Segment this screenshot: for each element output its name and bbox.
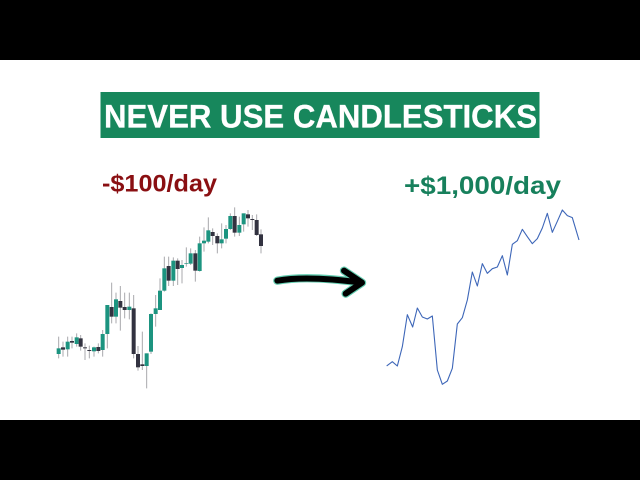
line chart xyxy=(387,210,579,384)
label: loss per day: -$100/day xyxy=(102,170,218,198)
bottom black bar xyxy=(0,420,640,480)
label: profit per day: +$1,000/day xyxy=(404,172,561,200)
arrow xyxy=(277,271,362,294)
top black bar xyxy=(0,0,640,60)
title banner: NEVER USE CANDLESTICKS xyxy=(104,98,537,134)
candlestick chart xyxy=(57,207,263,388)
